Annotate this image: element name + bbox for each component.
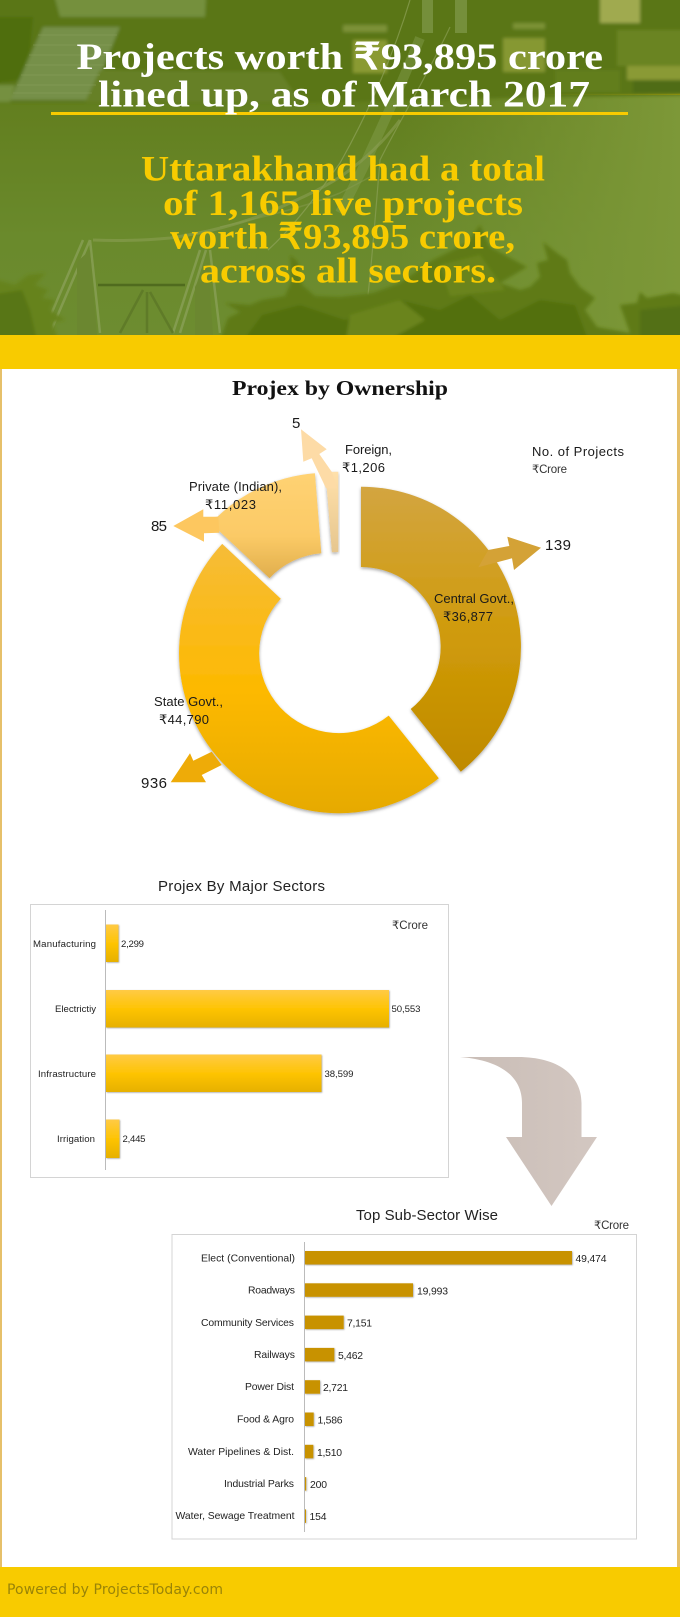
subtitle	[141, 148, 545, 290]
arrow: curved down arrow	[460, 1057, 597, 1206]
labels: slices and counts: ₹Crore	[532, 464, 567, 476]
labels: slices and counts: ₹36,877	[443, 609, 493, 624]
category labels	[176, 1254, 295, 1522]
value labels: 5,462	[338, 1351, 363, 1362]
slice: Central Govt.	[361, 487, 521, 772]
foliage	[0, 225, 680, 345]
label backing: private value	[204, 505, 218, 516]
white content panel	[2, 369, 677, 1567]
unit: ₹Crore	[594, 1220, 629, 1232]
hero photo panel	[0, 0, 680, 345]
category labels: Infrastructure	[38, 1069, 96, 1080]
title second line: lined up, as of March 2017	[98, 74, 590, 116]
panel: major sectors bar chart	[30, 878, 448, 1178]
labels: slices and counts: State Govt.,	[154, 694, 223, 709]
title underline	[51, 112, 628, 115]
value labels: 1,510	[317, 1448, 342, 1459]
labels: slices and counts: 85	[151, 518, 167, 535]
value labels: 49,474	[576, 1254, 607, 1265]
heading: Projex by Ownership: Projex by Ownership	[232, 376, 448, 400]
yellow band	[0, 335, 680, 369]
slice: Foreign	[326, 472, 338, 552]
value labels: 200	[310, 1480, 327, 1491]
heading: Projex By Major Sectors: Projex By Major Sectors	[158, 878, 325, 895]
subtitle: of 1,165 live projects	[163, 183, 523, 223]
unit: ₹Crore	[392, 920, 428, 932]
labels: slices and counts: 5	[292, 415, 300, 432]
labels: slices and counts: Foreign,	[345, 442, 392, 457]
arrow: Central Govt. projects	[478, 537, 541, 570]
suspension bridge	[43, 0, 467, 333]
category labels: Food & Agro	[237, 1414, 294, 1426]
footer band	[0, 1567, 680, 1617]
value labels: 38,599	[324, 1069, 354, 1080]
value labels: 19,993	[417, 1286, 448, 1298]
labels: slices and counts	[141, 415, 624, 792]
category labels: Water, Sewage Treatment	[176, 1511, 295, 1522]
category labels: Railways	[254, 1350, 295, 1361]
slice: Private (Indian)	[211, 473, 321, 578]
category labels: Elect (Conventional)	[201, 1254, 295, 1264]
category labels: Water Pipelines & Dist.	[188, 1447, 294, 1458]
ghats and far bank	[0, 0, 680, 103]
labels: slices and counts: No. of Projects	[532, 444, 624, 459]
title: Projects worth ₹93,895 crore	[76, 37, 603, 78]
heading: Top Sub-Sector Wise: Top Sub-Sector Wise	[356, 1207, 498, 1224]
value labels: 154	[310, 1512, 327, 1523]
chart frame	[172, 1234, 636, 1539]
category labels: Roadways	[248, 1286, 295, 1296]
value labels: 7,151	[347, 1318, 372, 1330]
labels: slices and counts: Central Govt.,	[434, 591, 514, 606]
labels: slices and counts: 139	[545, 537, 571, 554]
subtitle: worth ₹93,895 crore,	[170, 216, 515, 256]
panel: sub-sector bar chart	[172, 1207, 636, 1539]
arrow: State Govt. projects	[171, 752, 222, 782]
value labels: 2,299	[121, 939, 144, 950]
category labels: Industrial Parks	[224, 1479, 294, 1490]
labels: slices and counts: ₹1,206	[342, 460, 385, 475]
labels: slices and counts: ₹44,790	[159, 712, 209, 727]
chart frame	[30, 904, 448, 1178]
category labels	[33, 939, 96, 1145]
category labels: Power Dist	[245, 1382, 294, 1393]
value labels: 1,586	[318, 1416, 343, 1426]
arrow: Private projects	[173, 509, 219, 542]
category labels: Manufacturing	[33, 939, 96, 950]
axis	[304, 1242, 306, 1532]
value labels	[310, 1254, 607, 1523]
bars	[305, 1251, 572, 1523]
category labels: Electrictiy	[55, 1004, 96, 1015]
panel: ownership donut	[141, 376, 624, 813]
value labels: 2,445	[122, 1134, 146, 1145]
slice: State Govt.	[179, 544, 439, 813]
footer text: Powered by ProjectsToday.com	[7, 1582, 223, 1598]
arrow: Foreign projects	[301, 429, 337, 488]
bars	[106, 924, 389, 1158]
category labels: Community Services	[201, 1318, 294, 1329]
labels: slices and counts: 936	[141, 775, 167, 792]
labels: slices and counts: Private (Indian),	[189, 479, 282, 494]
axis	[104, 910, 106, 1170]
labels: slices and counts: ₹11,023	[205, 497, 256, 512]
value labels: 50,553	[392, 1004, 420, 1015]
subtitle: Uttarakhand had a total	[141, 148, 545, 188]
category labels: Irrigation	[57, 1134, 95, 1145]
value labels	[121, 939, 420, 1145]
subtitle: across all sectors.	[200, 250, 496, 290]
value labels: 2,721	[323, 1383, 348, 1394]
